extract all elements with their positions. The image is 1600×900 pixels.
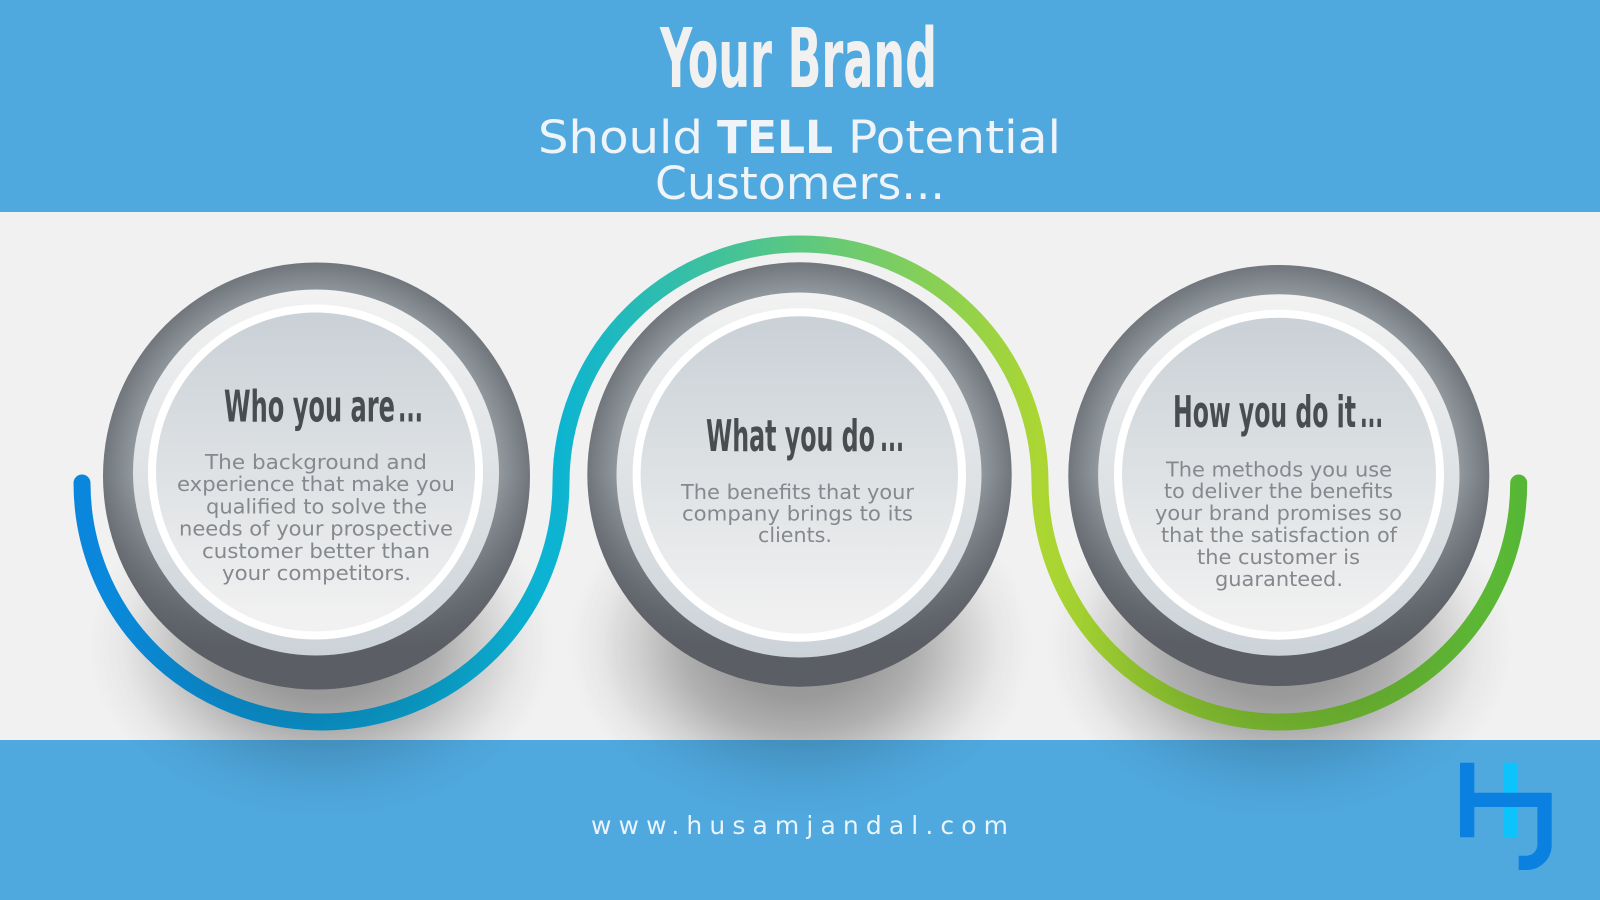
body text: company brings to its xyxy=(682,502,913,526)
body text: The background and xyxy=(204,450,427,474)
panel: what you do xyxy=(587,262,1012,687)
light ring xyxy=(133,290,499,656)
heading xyxy=(1173,387,1383,438)
subtitle xyxy=(538,111,1061,210)
subtitle: Customers... xyxy=(655,157,945,210)
ring shading xyxy=(587,262,1012,687)
heading: ... xyxy=(398,382,423,432)
header band xyxy=(0,0,1600,212)
icon: HJ logo xyxy=(1460,763,1552,870)
body text xyxy=(680,480,915,547)
body text: to deliver the benefits xyxy=(1164,479,1393,503)
body text: your brand promises so xyxy=(1155,501,1402,525)
body text: customer better than xyxy=(202,539,430,563)
body text: The benefits that your xyxy=(680,480,915,504)
outer ring xyxy=(587,262,1012,687)
ring shading xyxy=(1068,265,1489,686)
body text: clients. xyxy=(758,523,832,547)
background panel xyxy=(0,211,1600,741)
ring shading xyxy=(103,262,530,690)
body text: that the satisfaction of xyxy=(1161,523,1398,547)
body text xyxy=(177,450,455,585)
heading: ... xyxy=(880,411,904,462)
heading: How you do it xyxy=(1173,387,1356,438)
title: Your Brand xyxy=(659,12,937,107)
outer ring xyxy=(1068,265,1489,686)
heading: ... xyxy=(1360,387,1383,438)
inner face xyxy=(637,312,962,638)
body text: qualified to solve the xyxy=(206,494,427,518)
subtitle: Potential xyxy=(848,111,1061,164)
body text: The methods you use xyxy=(1165,458,1392,482)
circle shadows over wave xyxy=(139,596,1462,740)
panel: how you do it xyxy=(1068,265,1489,686)
light ring xyxy=(1098,294,1460,656)
subtitle: TELL xyxy=(717,111,833,164)
footer band xyxy=(0,740,1600,900)
body text: the customer is xyxy=(1197,545,1360,569)
outer ring xyxy=(103,262,530,690)
body text: your competitors. xyxy=(222,561,411,585)
inner face xyxy=(152,308,479,636)
footer shadows xyxy=(181,740,1420,787)
gradient wave line xyxy=(82,244,1519,722)
body text: experience that make you xyxy=(177,472,455,496)
subtitle: Should xyxy=(538,111,703,164)
body text: needs of your prospective xyxy=(179,516,453,540)
circle shadows under wave xyxy=(130,588,1472,740)
website url: www.husamjandal.com xyxy=(591,811,1008,840)
panel: who you are xyxy=(103,262,530,690)
light ring xyxy=(616,292,982,658)
inner face xyxy=(1118,314,1440,636)
body text: guaranteed. xyxy=(1215,567,1343,591)
heading: Who you are xyxy=(224,382,395,432)
heading: What you do xyxy=(706,411,875,462)
body text xyxy=(1155,458,1402,591)
